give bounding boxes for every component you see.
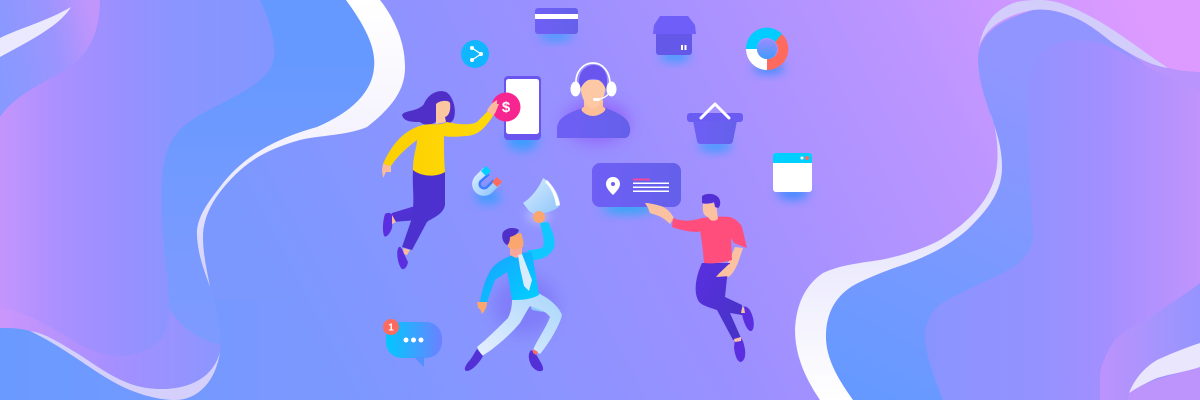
woman in yellow bbox=[382, 91, 499, 269]
right purple blob bbox=[925, 40, 1200, 400]
icon: browser window bbox=[773, 153, 812, 200]
pink shirt bbox=[672, 217, 747, 263]
man's face bbox=[508, 233, 523, 249]
hair bbox=[702, 194, 720, 208]
icon: dollar coin: $ bbox=[502, 99, 511, 116]
woman's hand right bbox=[487, 100, 499, 116]
man's raised arm and fist bbox=[527, 222, 555, 260]
bottom left ribbon bbox=[30, 331, 220, 400]
right forearm bbox=[717, 247, 743, 277]
icon: support agent bbox=[557, 63, 630, 142]
left blue blob bbox=[0, 0, 374, 389]
man's hand bbox=[477, 302, 487, 314]
top left ribbon bbox=[0, 7, 71, 57]
icon: donut chart bbox=[746, 28, 788, 74]
right blue blob bbox=[826, 10, 1200, 400]
man in pink bbox=[645, 194, 754, 362]
man's neck and collar bbox=[510, 248, 522, 258]
woman's left shoe bbox=[383, 213, 393, 237]
icon: dollar coin bbox=[492, 92, 520, 122]
top right ribbon bbox=[979, 0, 1168, 68]
man's tie bbox=[518, 254, 532, 291]
icon: smartphone bbox=[504, 76, 541, 151]
trousers bbox=[696, 263, 742, 340]
man's ankle bbox=[533, 349, 538, 355]
head and neck bbox=[703, 203, 718, 221]
bottom right lilac area bbox=[1128, 367, 1200, 400]
left purple blob bbox=[0, 0, 274, 356]
bottom right ribbon bbox=[1129, 343, 1200, 393]
left wave panel bbox=[0, 0, 405, 400]
chat bubble bbox=[383, 319, 442, 367]
woman's sweater bbox=[383, 111, 493, 176]
woman's left leg bbox=[392, 195, 445, 222]
bottom left corner tint bbox=[0, 300, 320, 400]
icon: map pin bbox=[606, 177, 620, 195]
lower shoe bbox=[734, 337, 745, 362]
left lower pink band bbox=[0, 290, 221, 389]
woman's hand left bbox=[382, 164, 391, 178]
right top pink band bbox=[1113, 43, 1200, 90]
man's left shoe bbox=[465, 349, 483, 371]
ankles bbox=[734, 307, 745, 342]
pointing hand and arm bbox=[645, 203, 674, 224]
woman's hair bbox=[402, 91, 455, 125]
right wave panel bbox=[795, 0, 1200, 400]
upper shoe bbox=[742, 307, 754, 331]
icon: box bbox=[653, 16, 696, 62]
inner trouser shade bbox=[528, 300, 545, 312]
man's right shoe bbox=[529, 350, 543, 371]
card text lines bbox=[633, 178, 669, 192]
main white ribbon right bbox=[795, 113, 1002, 400]
typing dots bbox=[404, 338, 424, 342]
woman's ankles bbox=[392, 215, 410, 255]
man's trousers bbox=[477, 293, 562, 356]
woman's right shoe bbox=[397, 247, 408, 269]
hand on hip bbox=[716, 264, 733, 277]
main white ribbon left bbox=[197, 0, 405, 287]
woman's right leg bbox=[402, 170, 445, 250]
icon: credit card bbox=[535, 8, 578, 41]
man's sweater bbox=[480, 252, 539, 302]
right bottom corner shape bbox=[1100, 283, 1200, 400]
woman's face and neck bbox=[436, 101, 450, 124]
man with megaphone bbox=[465, 178, 562, 371]
icon: shopping basket bbox=[687, 104, 743, 152]
icon: magnet bbox=[475, 166, 502, 204]
location card bbox=[592, 163, 681, 214]
notification badge: 1 bbox=[388, 322, 394, 334]
icon: share bbox=[461, 40, 489, 68]
man's hair bbox=[502, 228, 519, 245]
left upper corner shape bbox=[0, 0, 100, 117]
megaphone bbox=[523, 178, 560, 223]
